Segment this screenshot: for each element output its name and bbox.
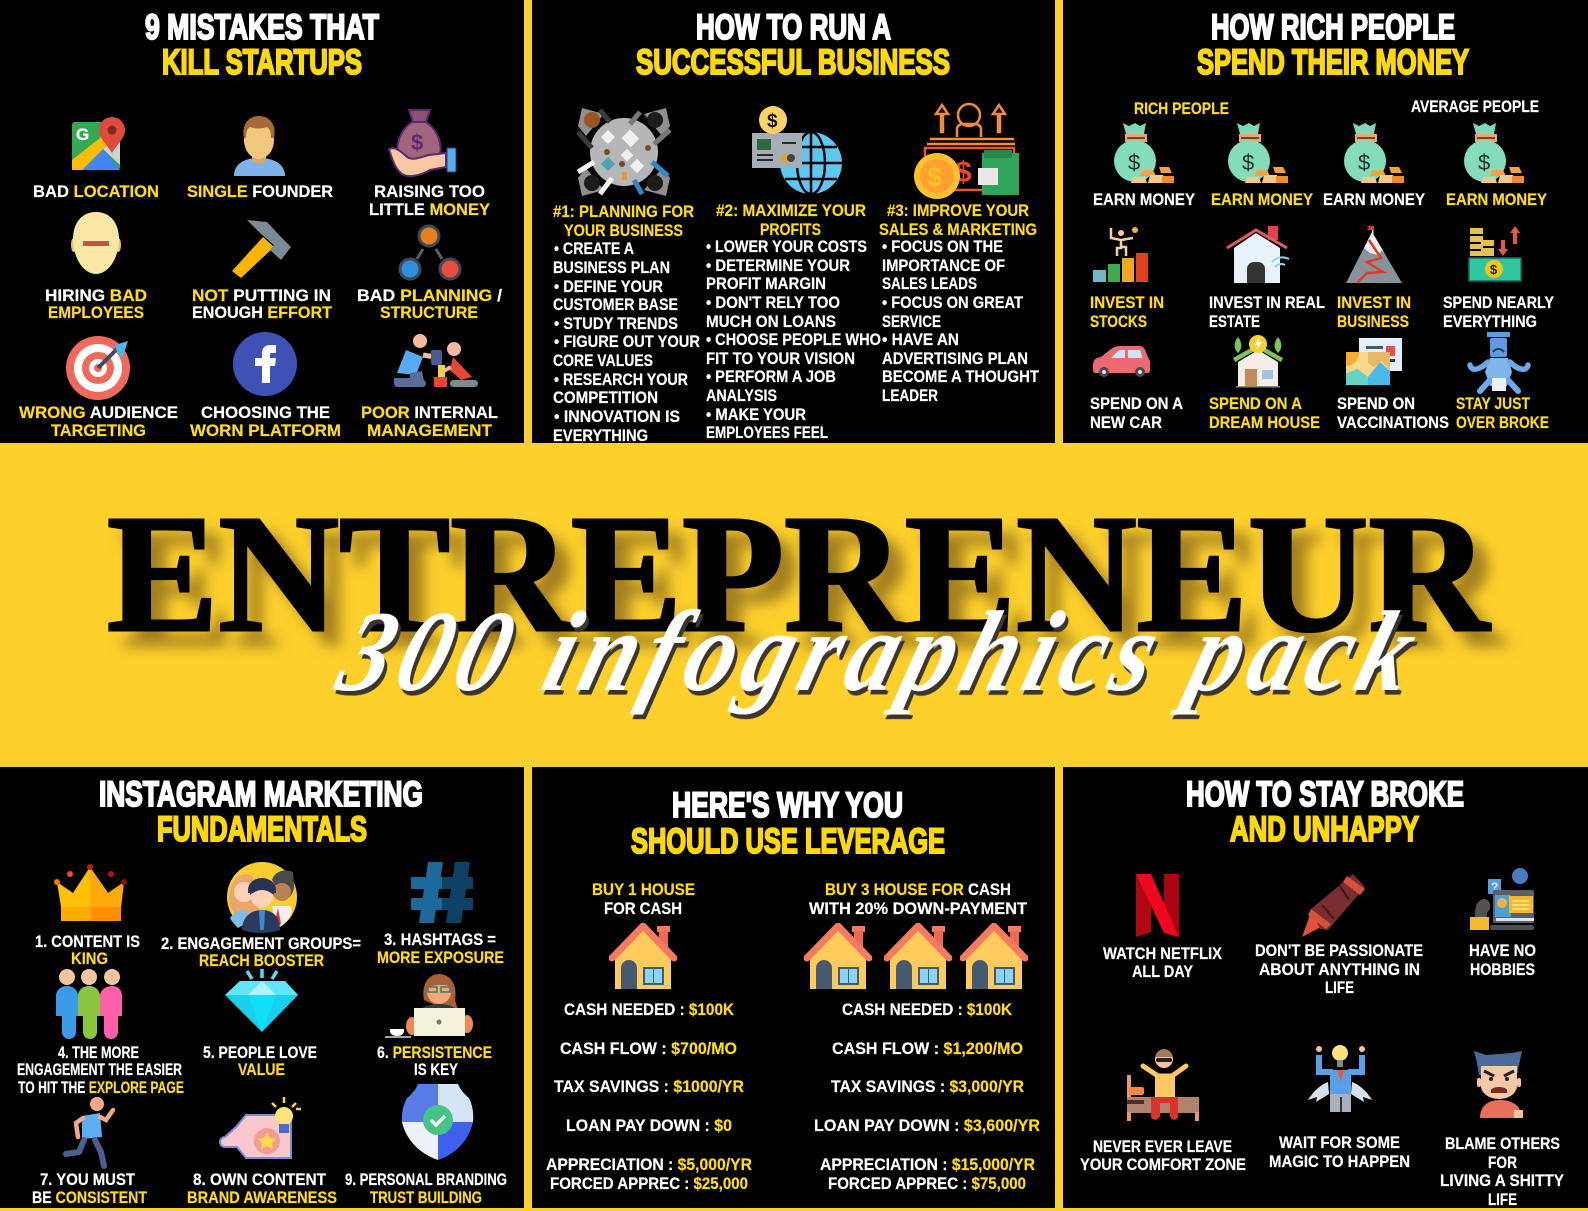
column: planning: YOUR BUSINESS (564, 222, 683, 240)
labels: spend row: DREAM HOUSE (1209, 414, 1320, 432)
heading: 9 mistakes: 9 MISTAKES THAT (145, 8, 379, 47)
icon: single house (612, 926, 674, 989)
labels: earn money: EARN MONEY (1446, 191, 1547, 209)
item: engagement groups (161, 862, 361, 970)
label (361, 404, 498, 440)
column: planning: • CREATE A (554, 240, 634, 258)
icon: team portrait (227, 862, 297, 933)
subheading: buy 1 house: FOR CASH (604, 900, 682, 918)
label: YOUR COMFORT ZONE (1080, 1156, 1246, 1174)
item: wait for magic (1269, 1045, 1410, 1171)
label: TRUST BUILDING (370, 1189, 482, 1207)
icon: hashtag (411, 862, 473, 923)
panel: how to stay broke and unhappy (1063, 767, 1588, 1209)
column: planning: CORE VALUES (553, 352, 653, 370)
item: hiring bad employees (45, 212, 147, 322)
subheading: buy 3 houses (809, 881, 1027, 918)
labels: invest row: INVEST IN (1090, 294, 1164, 312)
icon: house three of three (963, 926, 1025, 989)
item: watch netflix (1103, 874, 1222, 981)
column: planning: • RESEARCH YOUR (554, 371, 688, 389)
item: wrong audience (19, 336, 178, 440)
icon: sales and money: $ (955, 156, 972, 189)
label: 4. THE MORE (58, 1044, 139, 1062)
column: maximize profits: • CHOOSE PEOPLE WHO (706, 331, 881, 349)
heading: successful business (636, 8, 950, 82)
label: BE CONSISTENT (32, 1189, 147, 1207)
icon: money bag 3 (1344, 123, 1404, 183)
heading: instagram marketing: INSTAGRAM MARKETING (99, 775, 423, 814)
item: poor internal management (361, 334, 498, 440)
label: average people: AVERAGE PEOPLE (1411, 98, 1539, 116)
stats: three houses: LOAN PAY DOWN : $3,600/YR (814, 1117, 1040, 1135)
heading: rich people: SPEND THEIR MONEY (1197, 43, 1469, 82)
label: ABOUT ANYTHING IN (1259, 961, 1420, 979)
item: have no hobbies (1469, 868, 1536, 979)
icon: meeting table (578, 108, 670, 196)
item: brand awareness (187, 1097, 337, 1207)
label: MORE EXPOSURE (377, 949, 504, 967)
stats: three houses: APPRECIATION : $15,000/YR (820, 1156, 1035, 1174)
icon: diamond (225, 969, 298, 1032)
label: REACH BOOSTER (199, 952, 324, 970)
label: WAIT FOR SOME (1279, 1134, 1400, 1152)
stats: three houses: TAX SAVINGS : $3,000/YR (831, 1078, 1024, 1096)
icon: money bag 4 (1464, 123, 1524, 183)
column: sales and marketing: SALES LEADS (882, 275, 977, 293)
item: content is king (35, 864, 140, 968)
icon: map pin: G (76, 125, 89, 144)
heading: leverage: HERE'S WHY YOU (672, 786, 903, 825)
stats: one house (546, 1001, 752, 1193)
stats: three houses: FORCED APPREC : $75,000 (828, 1175, 1026, 1193)
heading: successful business: SUCCESSFUL BUSINESS (636, 43, 950, 82)
icon: woman with laptop (385, 974, 473, 1037)
icon: house two of three (887, 926, 949, 989)
column: planning: EVERYTHING (553, 427, 648, 445)
heading: stay broke: AND UNHAPPY (1230, 810, 1419, 849)
icon: crown (54, 864, 127, 921)
column: maximize profits: PROFITS (760, 221, 821, 239)
label: KING (71, 950, 108, 968)
icon: house one of three (807, 926, 869, 989)
panel: how to run a successful business (532, 0, 1055, 445)
item: not enough effort (192, 220, 332, 322)
icon: broke man (1470, 332, 1528, 391)
heading: rich people: HOW RICH PEOPLE (1211, 8, 1455, 47)
label (190, 404, 341, 440)
column: maximize profits: ANALYSIS (706, 387, 777, 405)
heading: rich people (1197, 8, 1469, 82)
label (187, 1171, 337, 1207)
label: VALUE (238, 1061, 285, 1079)
column: sales and marketing: LEADER (882, 387, 938, 405)
label (1269, 1134, 1410, 1171)
icon: dream house (1233, 335, 1283, 388)
label: BRAND AWARENESS (187, 1189, 337, 1207)
label (161, 935, 361, 970)
label: NEVER EVER LEAVE (1093, 1138, 1232, 1156)
item: personal branding (345, 1084, 507, 1207)
panel: 9 mistakes that kill startups (0, 0, 524, 443)
column: sales and marketing: #3: IMPROVE YOUR (887, 202, 1029, 220)
column: planning (553, 203, 700, 445)
column: planning: COMPETITION (553, 389, 658, 407)
stats: three houses (814, 1001, 1040, 1193)
icon: money bag 1 (1114, 123, 1174, 183)
labels: invest row: EVERYTHING (1443, 313, 1537, 331)
icon: hammer (232, 220, 291, 278)
heading: successful business: HOW TO RUN A (696, 8, 891, 47)
item: more engagement (17, 969, 184, 1097)
labels: invest row: INVEST IN (1337, 294, 1411, 312)
label (32, 1171, 147, 1207)
column: sales and marketing: ADVERTISING PLAN (882, 350, 1028, 368)
heading: stay broke: HOW TO STAY BROKE (1186, 775, 1464, 814)
item: never leave comfort zone (1080, 1049, 1246, 1174)
icon: sales and money (914, 104, 1019, 199)
subheading: buy 1 house: BUY 1 HOUSE (592, 881, 695, 899)
label: WORN PLATFORM (190, 422, 341, 440)
icon: money bag on hand: $ (411, 130, 423, 155)
label: 9. PERSONAL BRANDING (345, 1171, 507, 1189)
label: TARGETING (51, 422, 146, 440)
icon: maps and document (1346, 338, 1402, 385)
labels: invest row: INVEST IN REAL (1209, 294, 1325, 312)
label: rich people: RICH PEOPLE (1134, 100, 1229, 118)
icon: house with wifi (1227, 226, 1289, 283)
column: planning: • STUDY TRENDS (554, 315, 678, 333)
column: maximize profits: • DETERMINE YOUR (706, 257, 850, 275)
subtitle: 300 infographics pack: 300 infographics pack (325, 588, 1430, 715)
icon: shield (402, 1084, 473, 1160)
label: NOT PUTTING IN (192, 287, 331, 305)
label (377, 1044, 492, 1079)
subheading: buy 1 house (592, 881, 695, 918)
column: maximize profits: #2: MAXIMIZE YOUR (716, 202, 866, 220)
label (203, 1044, 317, 1079)
labels: invest row: BUSINESS (1337, 313, 1409, 331)
icon: angel with bulb head (1308, 1045, 1372, 1112)
label (357, 287, 502, 322)
label (1440, 1135, 1564, 1209)
label: DON'T BE PASSIONATE (1255, 942, 1423, 960)
icon: network (400, 226, 460, 279)
panel: instagram marketing fundamentals (0, 767, 524, 1208)
labels: invest row: ESTATE (1209, 313, 1260, 331)
labels: spend row: SPEND ON A (1209, 395, 1302, 413)
label: ENGAGEMENT THE EASIER (17, 1061, 182, 1079)
stats: one house: CASH NEEDED : $100K (564, 1001, 734, 1019)
column: maximize profits (706, 202, 881, 442)
labels: invest row: SPEND NEARLY (1443, 294, 1554, 312)
label: ENOUGH EFFORT (192, 304, 332, 322)
icon: blank face (71, 212, 121, 274)
heading: leverage (631, 786, 945, 861)
item: hashtags (377, 862, 504, 967)
label: SINGLE FOUNDER (187, 183, 333, 201)
icon: stocks (1093, 227, 1148, 282)
icon: netflix (1136, 874, 1179, 937)
label: 8. OWN CONTENT (193, 1171, 326, 1189)
label: HAVE NO (1469, 942, 1536, 960)
icon: money and coins (1469, 226, 1521, 281)
icon: three people (56, 969, 122, 1039)
column: planning: • INNOVATION IS (554, 408, 680, 426)
heading: stay broke (1186, 775, 1464, 849)
label: IS KEY (414, 1061, 458, 1079)
heading: leverage: SHOULD USE LEVERAGE (631, 822, 945, 861)
labels: earn money (1093, 191, 1547, 209)
icon: globe and card (752, 106, 842, 194)
item: single founder (187, 116, 333, 201)
icon: mountain (1346, 226, 1402, 283)
column: sales and marketing: SERVICE (882, 313, 941, 331)
label: STRUCTURE (380, 304, 478, 322)
panel: why you should use leverage (532, 767, 1055, 1208)
label: WATCH NETFLIX (1103, 945, 1222, 963)
item: blame others (1440, 1051, 1564, 1209)
label: TO HIT THE EXPLORE PAGE (18, 1079, 184, 1097)
column: maximize profits: • DON'T RELY TOO (706, 294, 840, 312)
label (377, 931, 504, 967)
column: sales and marketing: • FOCUS ON GREAT (882, 294, 1023, 312)
column: sales and marketing: BECOME A THOUGHT (882, 368, 1039, 386)
stats: three houses: CASH FLOW : $1,200/MO (832, 1040, 1023, 1058)
stats: three houses: CASH NEEDED : $100K (842, 1001, 1012, 1019)
icon: money and coins: $ (1490, 262, 1498, 277)
label: 1. CONTENT IS (35, 933, 140, 951)
label (45, 287, 147, 322)
label (1469, 942, 1536, 979)
label: LIFE (1325, 979, 1354, 997)
label: WRONG AUDIENCE (19, 404, 178, 422)
item: persistence is key (377, 974, 492, 1079)
column: sales and marketing: • HAVE AN (882, 331, 959, 349)
label: 3. HASHTAGS = (384, 931, 496, 949)
column: maximize profits: • MAKE YOUR (706, 406, 806, 424)
column: planning: • DEFINE YOUR (554, 278, 663, 296)
icon: tag with bulb (220, 1097, 301, 1158)
icon: person (234, 116, 285, 176)
label (19, 404, 178, 440)
label: BAD LOCATION (33, 183, 159, 201)
stats: one house: CASH FLOW : $700/MO (560, 1040, 737, 1058)
column: maximize profits: FIT TO YOUR VISION (706, 350, 855, 368)
column: maximize profits: EMPLOYEES FEEL (706, 424, 828, 442)
icon: two people with blocks (394, 334, 478, 387)
label (1255, 942, 1423, 997)
label: 6. PERSISTENCE (377, 1044, 492, 1062)
label (1080, 1138, 1246, 1174)
column: sales and marketing: SALES & MARKETING (879, 221, 1037, 239)
subheading: buy 3 houses: BUY 3 HOUSE FOR CASH (825, 881, 1011, 899)
heading: 9 mistakes (145, 8, 379, 82)
label: 5. PEOPLE LOVE (203, 1044, 317, 1062)
column: planning: #1: PLANNING FOR (553, 203, 694, 221)
heading: 9 mistakes: KILL STARTUPS (162, 43, 362, 82)
label (345, 1171, 507, 1207)
item: choosing the worn platform (190, 332, 341, 440)
item: be consistent (32, 1097, 147, 1207)
panel: how rich people spend their money (1063, 0, 1588, 443)
column: maximize profits: MUCH ON LOANS (706, 313, 836, 331)
stats: one house: FORCED APPREC : $25,000 (550, 1175, 748, 1193)
label: MANAGEMENT (367, 422, 492, 440)
icon: car (1093, 346, 1150, 377)
column: maximize profits: • LOWER YOUR COSTS (706, 238, 867, 256)
labels: earn money: EARN MONEY (1211, 191, 1313, 209)
item: don't be passionate (1255, 874, 1423, 997)
label: 7. YOU MUST (40, 1171, 135, 1189)
icon: money bag 2 (1228, 123, 1288, 183)
labels: spend row: STAY JUST (1456, 395, 1530, 413)
stats: one house: LOAN PAY DOWN : $0 (566, 1117, 732, 1135)
column: planning: CUSTOMER BASE (553, 296, 678, 314)
label: POOR INTERNAL (361, 404, 498, 422)
item: bad location (33, 117, 159, 201)
column: sales and marketing: • FOCUS ON THE (882, 238, 1003, 256)
label: CHOOSING THE (201, 404, 330, 422)
label: HIRING BAD (45, 287, 147, 305)
stats: one house: APPRECIATION : $5,000/YR (546, 1156, 752, 1174)
column: planning: BUSINESS PLAN (553, 259, 670, 277)
column: maximize profits: PROFIT MARGIN (706, 275, 826, 293)
item: people love value (203, 969, 317, 1079)
labels: spend row: NEW CAR (1090, 414, 1162, 432)
label: RAISING TOO (374, 183, 485, 201)
label: BLAME OTHERS (1445, 1135, 1560, 1153)
label (1103, 945, 1222, 981)
label: 2. ENGAGEMENT GROUPS= (161, 935, 361, 953)
icon: sales and money: $ (927, 162, 942, 192)
icon: crayon (1302, 874, 1365, 937)
labels: invest row: STOCKS (1090, 313, 1147, 331)
icon: angry man (1474, 1051, 1523, 1118)
main title: entrepreneur: ENTREPRENEUR (107, 481, 1491, 667)
label: FOR (1488, 1154, 1517, 1172)
label: HOBBIES (1470, 961, 1535, 979)
label (192, 287, 332, 322)
icon: runner (66, 1097, 113, 1166)
labels: spend row: SPEND ON (1337, 395, 1415, 413)
label: ALL DAY (1132, 963, 1193, 981)
icon: target (66, 336, 130, 400)
stats: one house: TAX SAVINGS : $1000/YR (554, 1078, 744, 1096)
label (17, 1044, 184, 1097)
item: raising too little money (369, 110, 490, 219)
subheading: buy 3 houses: WITH 20% DOWN-PAYMENT (809, 900, 1027, 918)
column: planning: • FIGURE OUT YOUR (554, 333, 700, 351)
label: LIVING A SHITTY (1440, 1172, 1564, 1190)
labels: earn money: EARN MONEY (1093, 191, 1195, 209)
labels: spend row: SPEND ON A (1090, 395, 1183, 413)
heading: instagram marketing (99, 775, 423, 849)
heading: instagram marketing: FUNDAMENTALS (157, 810, 367, 849)
label: LITTLE MONEY (369, 201, 490, 219)
labels: spend row (1090, 395, 1549, 432)
item: bad planning (357, 226, 502, 322)
labels: spend row: OVER BROKE (1456, 414, 1549, 432)
column: sales and marketing (879, 202, 1039, 405)
icon: globe and card: $ (767, 111, 778, 132)
label: LIFE (1488, 1191, 1517, 1209)
icon: facebook (233, 332, 297, 396)
column: maximize profits: • PERFORM A JOB (706, 368, 836, 386)
label: BAD PLANNING / (357, 287, 502, 305)
labels: invest row (1090, 294, 1554, 331)
column: sales and marketing: IMPORTANCE OF (882, 257, 1005, 275)
label (35, 933, 140, 968)
label: MAGIC TO HAPPEN (1269, 1153, 1410, 1171)
label: EMPLOYEES (48, 304, 144, 322)
labels: spend row: VACCINATIONS (1337, 414, 1449, 432)
icon: man by bed (1127, 1049, 1199, 1121)
labels: earn money: EARN MONEY (1323, 191, 1425, 209)
label (369, 183, 490, 219)
icon: computer: ? (1491, 880, 1498, 894)
